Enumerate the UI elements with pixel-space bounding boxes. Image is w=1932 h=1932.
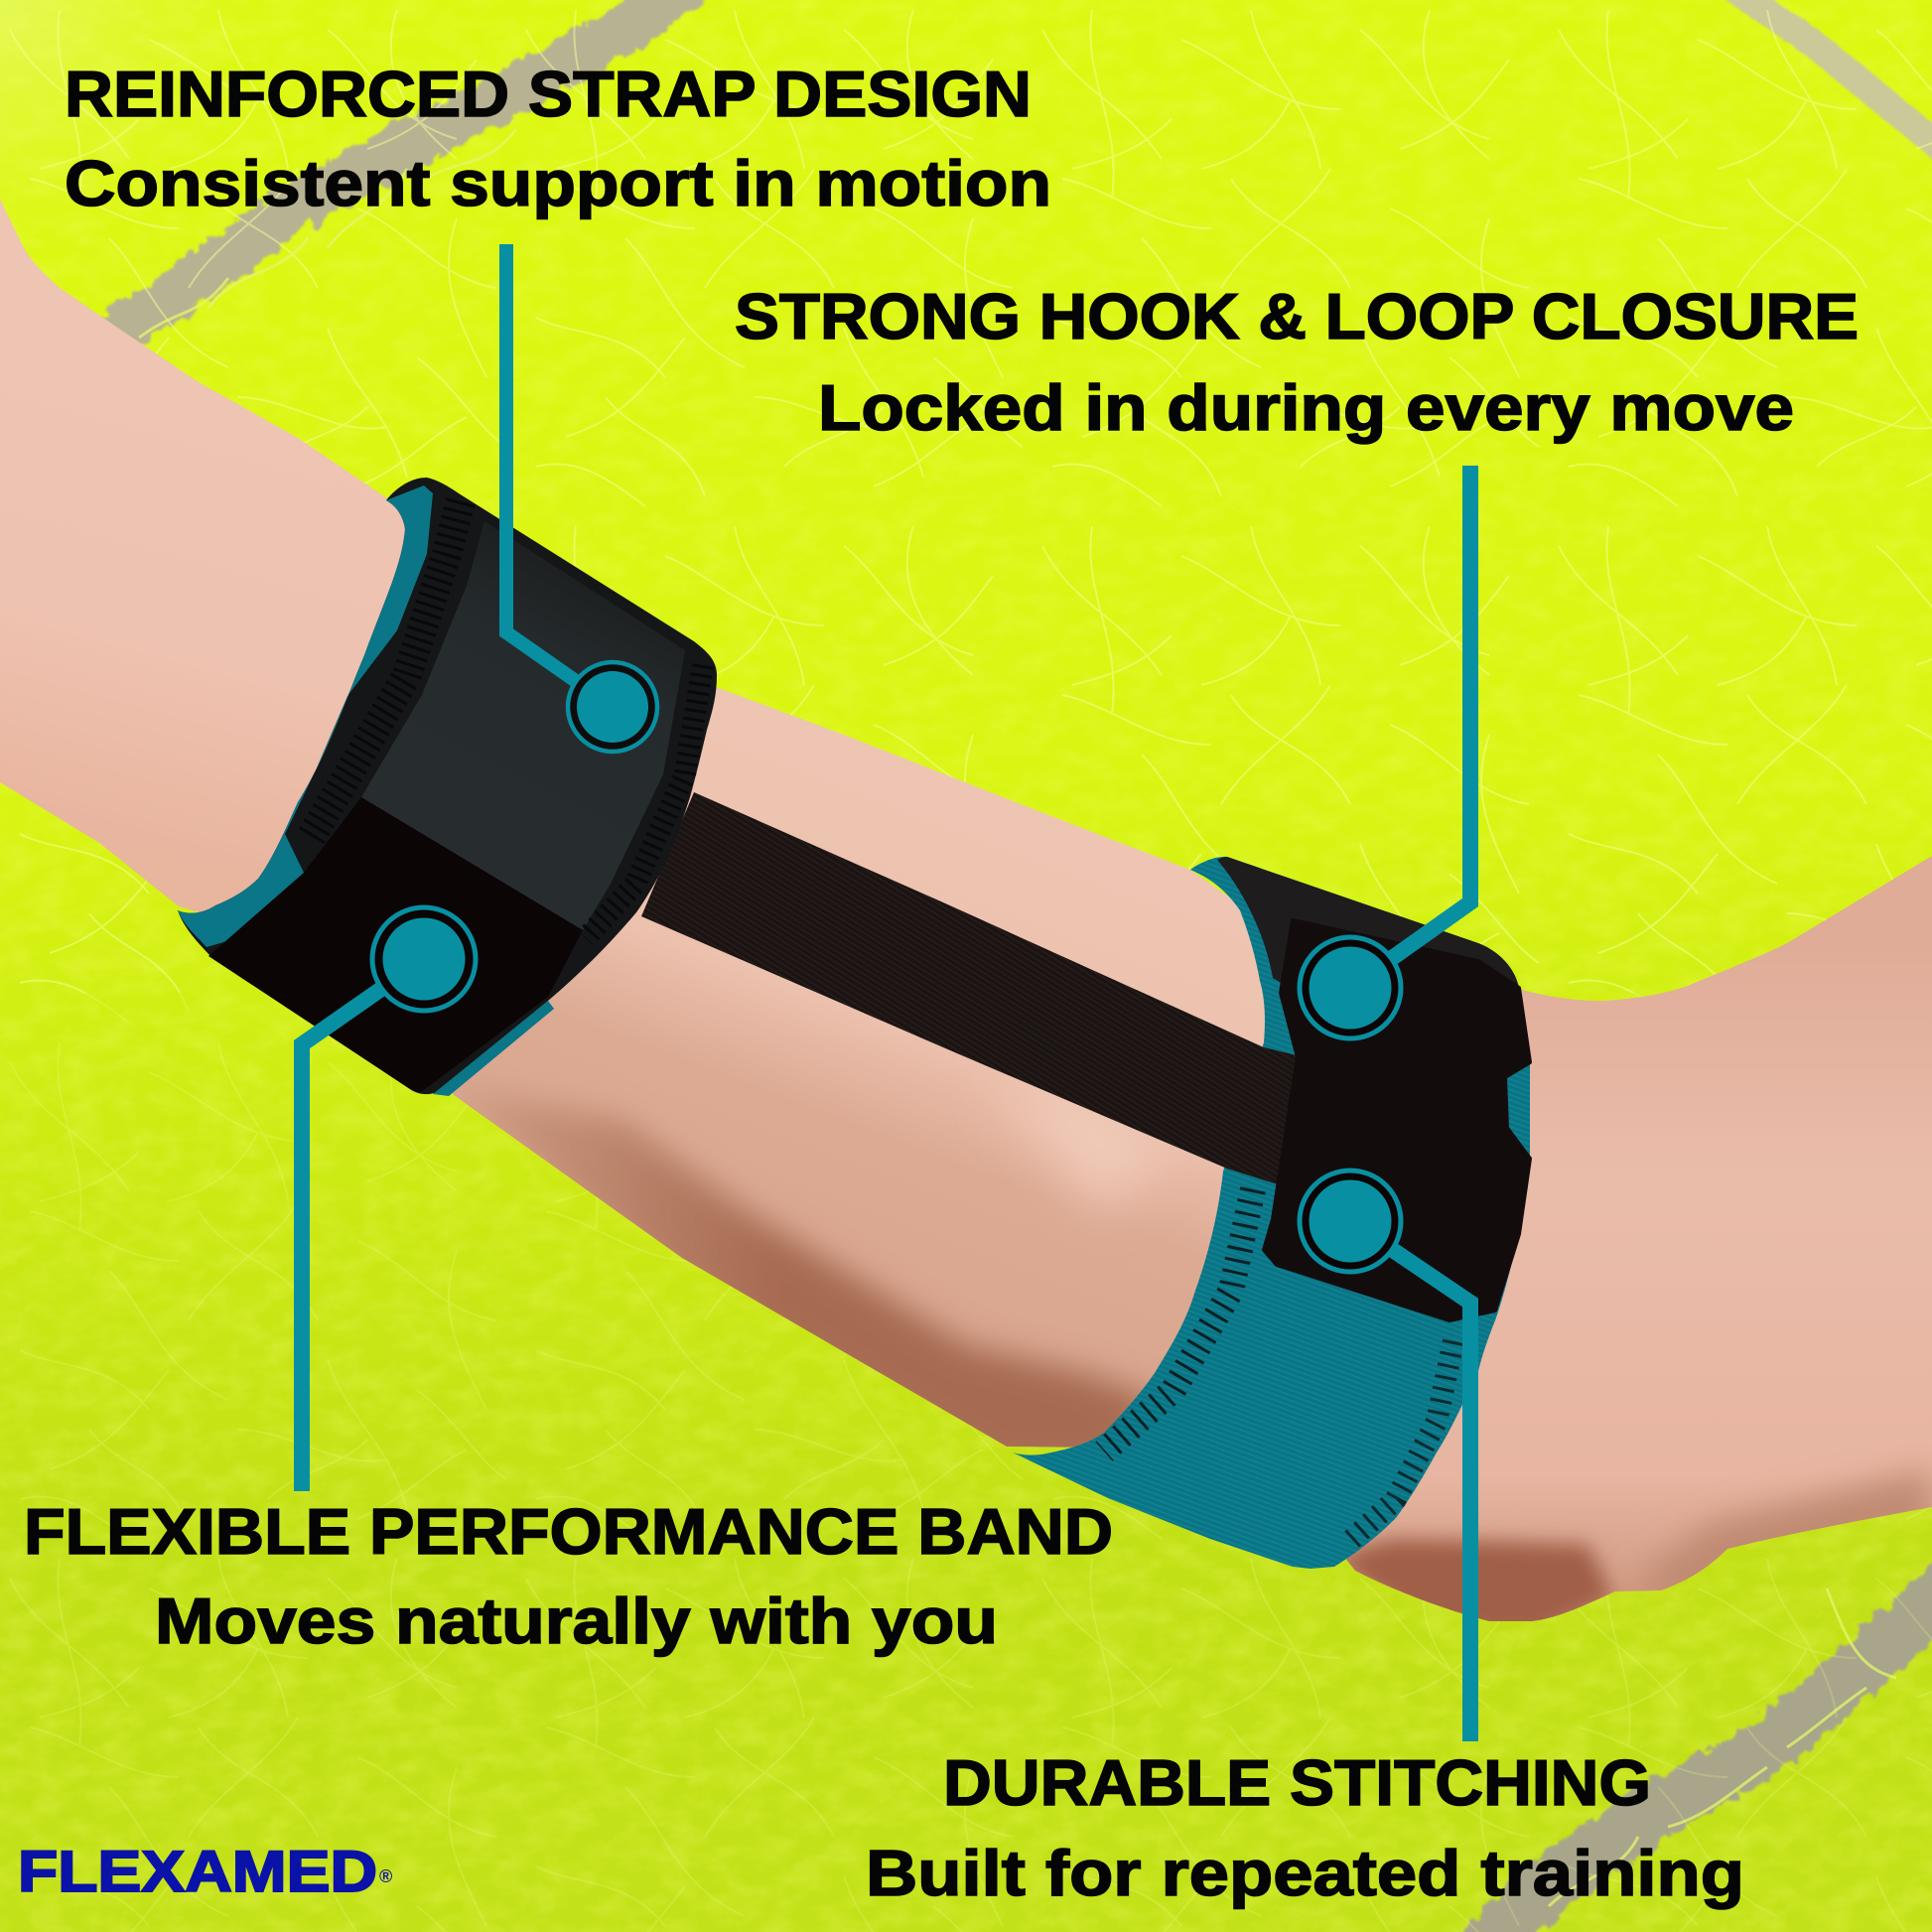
- left band lower teal edge: [433, 1001, 554, 1096]
- heading: durable stitching: DURABLE STITCHING: [943, 1746, 1651, 1819]
- right band top fabric: [1217, 857, 1519, 993]
- heading: strong hook and loop closure: [735, 280, 1859, 444]
- heading: flexible performance band: [24, 1495, 1113, 1657]
- right band hook patch: [1264, 920, 1530, 1320]
- marker: [372, 907, 476, 1011]
- forearm highlight: [1022, 1098, 1154, 1211]
- left band fabric panel: [361, 521, 685, 930]
- leader line: [1350, 1221, 1470, 1741]
- ball fibres top: [0, 0, 1932, 993]
- right band teal stitching: [1104, 1189, 1253, 1451]
- logo: flexamed: ®: [379, 1866, 392, 1886]
- callout: reinforced strap design: [506, 244, 657, 752]
- heading: strong hook and loop closure: Locked in during every move: [818, 371, 1794, 444]
- callout: durable stitching: [1300, 1171, 1470, 1741]
- left band body: [178, 478, 717, 1094]
- heading: reinforced strap design: Consistent support in motion: [65, 147, 1051, 219]
- heading: reinforced strap design: REINFORCED STRAP DESIGN: [65, 58, 1032, 130]
- left band stitching: [310, 501, 461, 839]
- heading: flexible performance band: FLEXIBLE PERFORMANCE BAND: [24, 1495, 1113, 1568]
- heading: strong hook and loop closure: STRONG HOOK & LOOP CLOSURE: [735, 280, 1859, 352]
- marker: [1300, 1171, 1401, 1272]
- left band teal edge: [178, 485, 433, 947]
- heading: reinforced strap design: [65, 58, 1051, 219]
- callout: flexible performance band: [302, 907, 476, 1491]
- arm: forearm: [427, 679, 1291, 1469]
- lower edge shadow: [1642, 1461, 1932, 1590]
- leader line: [302, 959, 424, 1491]
- right band teal body: [1013, 857, 1530, 1569]
- heading: durable stitching: Built for repeated training: [866, 1837, 1744, 1909]
- heading: durable stitching: [866, 1746, 1744, 1909]
- left band hook patch: [208, 797, 583, 1092]
- arm: elbow side: [1346, 856, 1932, 1621]
- leader line: [1350, 466, 1470, 988]
- heading: flexible performance band: Moves naturally with you: [155, 1585, 998, 1657]
- forearm shadow: [453, 1092, 1150, 1448]
- strap: [641, 792, 1301, 1185]
- ball fibres bottom: [0, 993, 1932, 1932]
- elbow under shadow: [1330, 1539, 1613, 1638]
- arm: upper arm: [0, 189, 457, 953]
- right band: [1013, 857, 1530, 1569]
- logo: flexamed: FLEXAMED: [18, 1840, 377, 1904]
- left band: [178, 478, 717, 1096]
- callout: strong hook and loop closure: [1300, 466, 1470, 1038]
- leader line: [506, 244, 613, 707]
- marker: [568, 662, 657, 752]
- marker: [1300, 937, 1401, 1038]
